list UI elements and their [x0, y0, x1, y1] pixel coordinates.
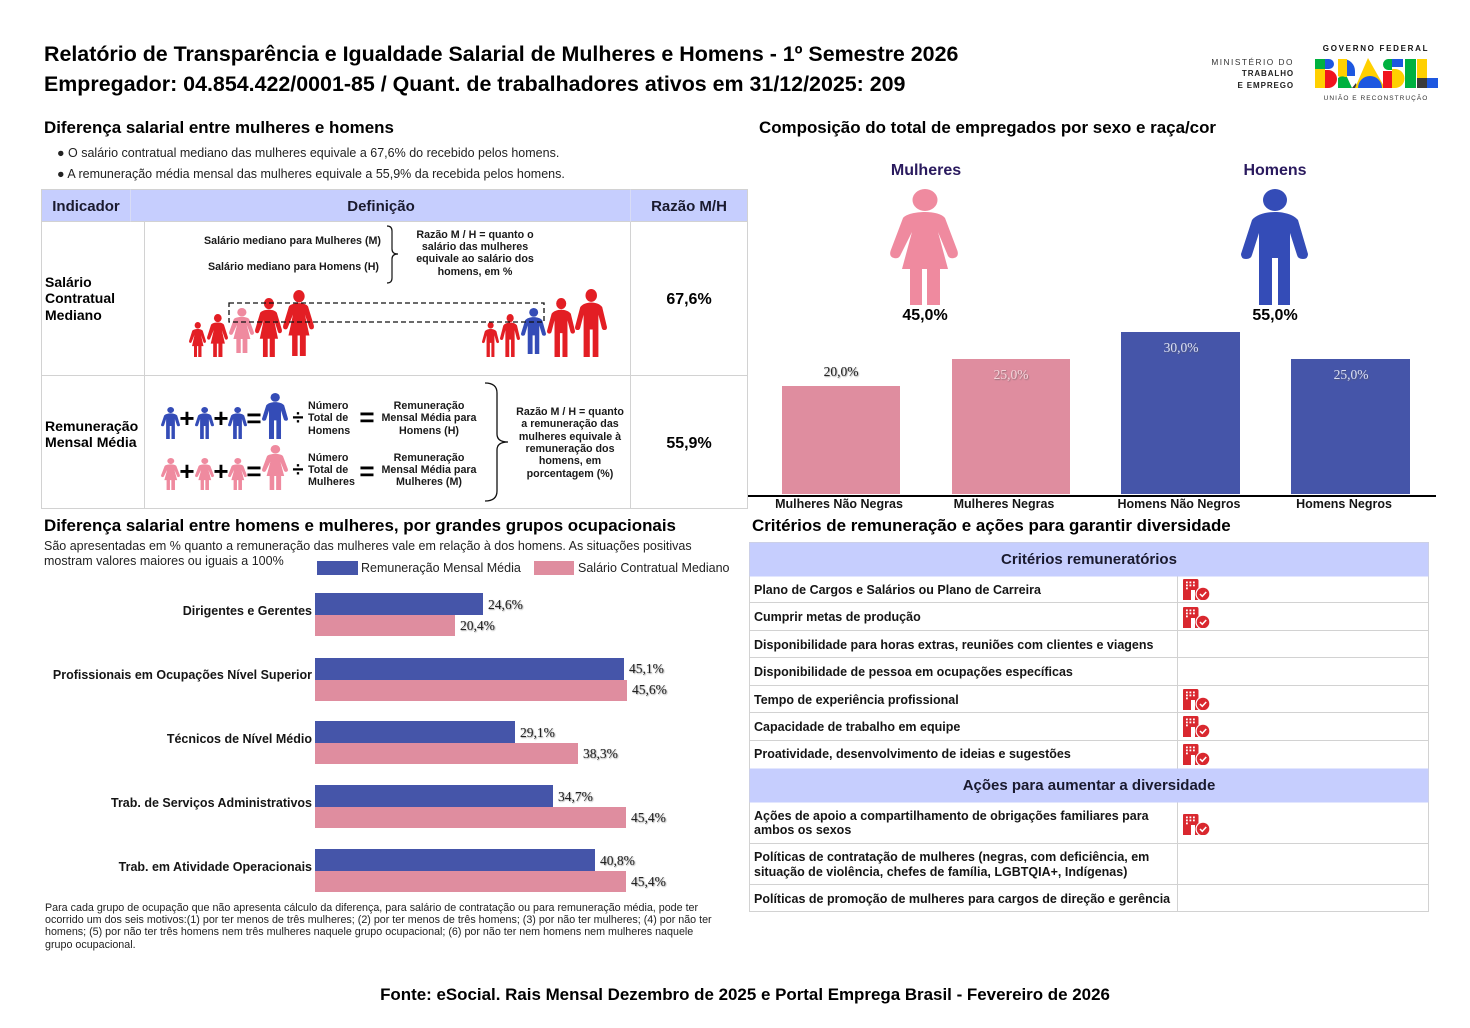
diagram: remuneração média definition: Remuneração: [394, 400, 465, 412]
heading: composição: Composição do total de empregados por sexo e raça/cor: [759, 118, 1216, 137]
group: Atividade Operacionais: Trab. em Atividade Operacionais: [119, 860, 312, 874]
diagram: remuneração média definition: Homens: [308, 425, 350, 437]
bar chart: composição: Mulheres Não Negras: [775, 497, 903, 511]
diagram: remuneração média definition: [161, 383, 624, 501]
group: Técnicos: Técnicos de Nível Médio: [167, 732, 312, 746]
diagram: remuneração média definition: Homens (H): [399, 425, 459, 437]
diagram: remuneração média definition: Número: [308, 452, 349, 464]
diagram: remuneração média definition: =: [359, 456, 375, 486]
text block: bullets: [57, 146, 565, 181]
footer: fonte: Fonte: eSocial. Rais Mensal Dezembro de 2025 e Portal Emprega Brasil - Fevereiro de 2026: [380, 985, 1110, 1004]
diagram: salário mediano definition: [189, 226, 607, 357]
label: Mulheres: Mulheres: [891, 162, 961, 179]
icon: man: [1241, 189, 1308, 305]
row label: salário contratual mediano: Contratual: [45, 290, 115, 306]
table: critérios e ações: Ações de apoio a compartilhamento de obrigações familiares para: [754, 809, 1150, 823]
diagram: salário mediano definition: Salário mediano para Mulheres (M): [204, 235, 381, 247]
diagram: remuneração média definition: +: [179, 403, 195, 433]
diagram: remuneração média definition: Mensal Média para: [381, 464, 478, 476]
value: 45,0%: 45,0%: [902, 307, 948, 324]
text block: explicação: [44, 539, 692, 568]
footnote: ocorrido um dos seis motivos:(1) por ter menos de três mulheres; (2) por ter menos de três homens; (3) por não ter mulheres; (4) por não ter: [45, 914, 712, 926]
table: critérios e ações: Ações para aumentar a diversidade: [963, 777, 1215, 794]
icons: empresa com check: [1183, 579, 1210, 836]
bar chart: composição: 20,0%: [824, 364, 858, 379]
footnote: Para cada grupo de ocupação que não apresenta cálculo da diferença, para salário de contratação ou para remuneração média, pode ter: [45, 902, 699, 914]
diagram: remuneração média definition: mulheres equivale à: [519, 431, 621, 443]
footnote: homens; (5) por não ter três homens nem três mulheres naquele grupo ocupacional; (6) por não ter nem homens nem mulheres naquele: [45, 926, 693, 938]
group: Dirigentes e Gerentes: Dirigentes e Gerentes: [183, 604, 312, 618]
group: Profissionais: 45,1%: [629, 661, 664, 676]
panel: composição: [748, 118, 1436, 511]
table: indicadores: Indicador: [52, 198, 120, 215]
group: Dirigentes e Gerentes: 24,6%: [488, 597, 523, 612]
icons: men salary line: [482, 289, 607, 357]
value: 67,6%: 67,6%: [666, 291, 712, 308]
group: Atividade Operacionais: 45,4%: [631, 874, 666, 889]
panel: critérios e ações: [750, 516, 1428, 912]
value: 55,9%: 55,9%: [666, 435, 712, 452]
row label: salário contratual mediano: [45, 274, 115, 323]
text block: explicação: São apresentadas em % quanto a remuneração das mulheres vale em relação à dos homens. As situações positivas: [44, 539, 692, 553]
table: indicadores: Definição: [347, 198, 415, 215]
diagram: remuneração média definition: ÷: [293, 459, 304, 481]
table: critérios e ações: Disponibilidade de pessoa em ocupações específicas: [754, 665, 1073, 679]
footnote: grupo ocupacional.: [45, 939, 136, 951]
table: critérios e ações: Proatividade, desenvolvimento de ideias e sugestões: [754, 747, 1071, 761]
legend: [317, 561, 730, 575]
text block: explicação: mostram valores maiores ou iguais a 100%: [44, 554, 284, 568]
heading: critérios: Critérios de remuneração e ações para garantir diversidade: [752, 516, 1231, 535]
group: Serviços Administrativos: [111, 785, 666, 828]
panel: grupos ocupacionais: [44, 516, 730, 951]
diagram: remuneração média definition: Número: [308, 400, 349, 412]
panel: diferença salarial: [42, 118, 748, 508]
table: critérios e ações: Critérios remuneratórios: [1001, 551, 1177, 568]
logo: Ministério do Trabalho e Emprego: E EMPREGO: [1237, 81, 1294, 90]
group: Atividade Operacionais: 40,8%: [600, 853, 635, 868]
diagram: remuneração média definition: a remuneração das: [521, 418, 619, 430]
logo: Ministério do Trabalho e Emprego: TRABALHO: [1242, 69, 1294, 78]
diagram: remuneração média definition: Mulheres: [308, 476, 355, 488]
bar chart: composição: [748, 332, 1436, 511]
table: critérios e ações: situação de violência, chefes de família, LGBTQIA+, Indígenas): [754, 865, 1127, 879]
diagram: remuneração média definition: +: [213, 456, 229, 486]
diagram: remuneração média definition: Total de: [308, 464, 348, 476]
table: critérios e ações: Políticas de promoção de mulheres para cargos de direção e gerência: [754, 892, 1171, 906]
diagram: salário mediano definition: Razão M / H = quanto o: [416, 229, 534, 241]
row label: remuneração mensal média: [45, 418, 139, 450]
bar chart: composição: 25,0%: [994, 367, 1028, 382]
bar chart: composição: Homens Negros: [1296, 497, 1392, 511]
diagram: remuneração média definition: remuneração dos: [525, 443, 615, 455]
table: critérios e ações: Políticas de contratação de mulheres (negras, com deficiência, em: [754, 850, 1149, 864]
diagram: remuneração média definition: +: [179, 456, 195, 486]
diagram: remuneração média definition: =: [246, 456, 262, 486]
table: critérios e ações: Cumprir metas de produção: [754, 610, 921, 624]
group: Dirigentes e Gerentes: [183, 593, 523, 636]
group: Profissionais: Profissionais em Ocupações Nível Superior: [53, 668, 312, 682]
table: critérios e ações: [750, 542, 1428, 912]
title: [44, 42, 958, 96]
table: critérios e ações: ambos os sexos: [754, 823, 851, 837]
bar chart: composição: Homens Não Negros: [1118, 497, 1241, 511]
legend: Salário Contratual Mediano: [578, 561, 730, 575]
diagram: remuneração média definition: porcentagem (%): [527, 468, 614, 480]
title: Empregador: 04.854.422/0001-85 / Quant. de trabalhadores ativos em 31/12/2025: 209: [44, 72, 906, 96]
diagram: remuneração média definition: Mulheres (M): [396, 476, 462, 488]
legend: Remuneração Mensal Média: [361, 561, 521, 575]
bar chart: composição: 30,0%: [1164, 340, 1198, 355]
group: Técnicos: 29,1%: [520, 725, 555, 740]
icon: woman: [890, 189, 958, 305]
row label: remuneração mensal média: Mensal Média: [45, 434, 137, 450]
logo: Ministério do Trabalho e Emprego: MINISTÉRIO DO: [1211, 57, 1294, 67]
diagram: salário mediano definition: homens, em %: [438, 266, 513, 278]
diagram: remuneração média definition: =: [246, 403, 262, 433]
table: critérios e ações: Disponibilidade para horas extras, reuniões com clientes e viagens: [754, 638, 1153, 652]
diagram: salário mediano definition: equivale ao salário dos: [416, 253, 534, 265]
text block: bullets: ● O salário contratual mediano das mulheres equivale a 67,6% do recebido pelos homens.: [57, 146, 559, 160]
heading: grupos ocupacionais: Diferença salarial entre homens e mulheres, por grandes grupos ocupacionais: [44, 516, 676, 535]
group: Serviços Administrativos: Trab. de Serviços Administrativos: [111, 796, 312, 810]
table: indicadores: Razão M/H: [651, 198, 727, 215]
group: Profissionais: [53, 658, 667, 701]
table: critérios e ações: Capacidade de trabalho em equipe: [754, 720, 960, 734]
table: critérios e ações: Plano de Cargos e Salários ou Plano de Carreira: [754, 583, 1042, 597]
row label: remuneração mensal média: Remuneração: [45, 418, 139, 434]
diagram: remuneração média definition: homens, em: [539, 455, 601, 467]
diagram: remuneração média definition: Razão M / H = quanto: [516, 406, 624, 418]
value: 55,0%: 55,0%: [1252, 307, 1298, 324]
diagram: salário mediano definition: salário das mulheres: [422, 241, 528, 253]
diagram: remuneração média definition: +: [213, 403, 229, 433]
icons: men formula: [161, 393, 288, 439]
bar chart: composição: Mulheres Negras: [954, 497, 1054, 511]
footnote: [45, 902, 712, 951]
diagram: remuneração média definition: =: [359, 402, 375, 432]
logo: Governo Federal Brasil: GOVERNO FEDERAL: [1323, 44, 1429, 53]
row label: salário contratual mediano: Mediano: [45, 307, 102, 323]
table: critérios e ações: Tempo de experiência profissional: [754, 693, 959, 707]
diagram: remuneração média definition: Mensal Média para: [381, 412, 478, 424]
group: Serviços Administrativos: 34,7%: [558, 789, 593, 804]
group: Técnicos: [167, 721, 618, 764]
diagram: salário mediano definition: Salário mediano para Homens (H): [208, 261, 379, 273]
group: Técnicos: 38,3%: [583, 746, 618, 761]
group: Atividade Operacionais: [119, 849, 666, 892]
table: indicadores: [42, 190, 748, 508]
diagram: remuneração média definition: Total de: [308, 412, 348, 424]
text block: bullets: ● A remuneração média mensal das mulheres equivale a 55,9% da recebida pelos homens.: [57, 167, 565, 181]
row label: salário contratual mediano: Salário: [45, 274, 92, 290]
label: Homens: Homens: [1243, 162, 1307, 179]
title: Relatório de Transparência e Igualdade Salarial de Mulheres e Homens - 1º Semestre 2026: [44, 42, 958, 66]
logo: Ministério do Trabalho e Emprego: [1211, 57, 1294, 90]
logo: Governo Federal Brasil: UNIÃO E RECONSTRUÇÃO: [1324, 93, 1428, 102]
diagram: remuneração média definition: ÷: [293, 407, 304, 429]
bar chart: ocupações: [53, 593, 667, 892]
group: Profissionais: 45,6%: [632, 682, 667, 697]
bar chart: composição: 25,0%: [1334, 367, 1368, 382]
heading: diferença salarial: Diferença salarial entre mulheres e homens: [44, 118, 394, 137]
icons: women formula: [161, 445, 288, 490]
group: Serviços Administrativos: 45,4%: [631, 810, 666, 825]
diagram: remuneração média definition: Remuneração: [394, 452, 465, 464]
icons: women salary line: [189, 290, 314, 357]
logo: Governo Federal Brasil: [1315, 44, 1438, 102]
group: Dirigentes e Gerentes: 20,4%: [460, 618, 495, 633]
